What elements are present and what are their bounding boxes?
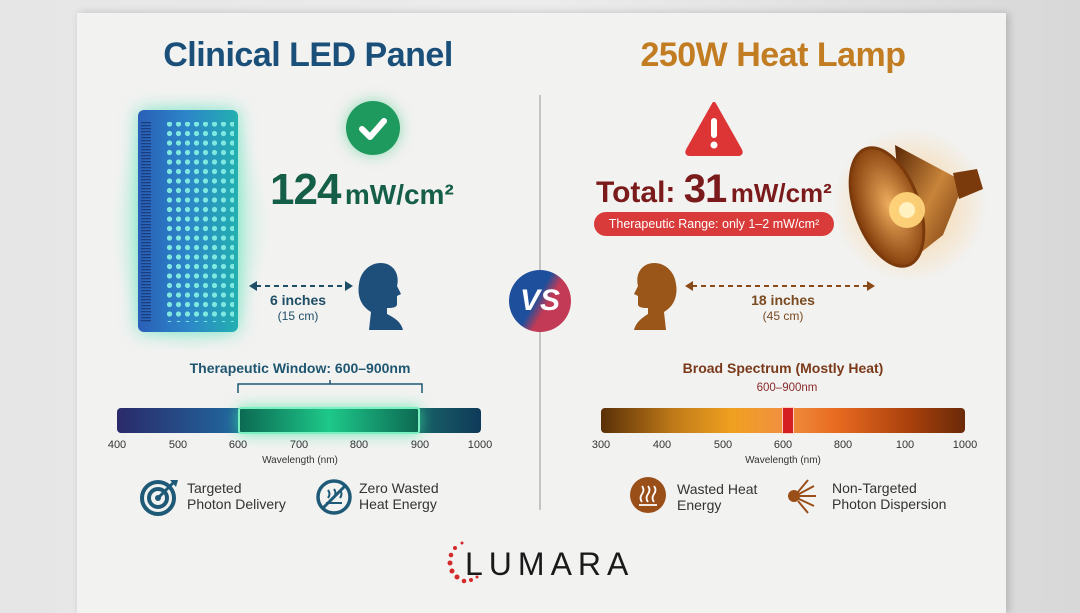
- feature: zero heat: [316, 479, 439, 515]
- text: 700: [290, 439, 308, 451]
- distance lamp: 18 inches: [751, 292, 815, 308]
- icon: heat lamp: [839, 134, 983, 276]
- bracket: [237, 380, 423, 393]
- distance lamp: (45 cm): [763, 309, 803, 323]
- chart: lamp spectrum: [601, 408, 965, 433]
- text: 1000: [468, 439, 492, 451]
- callout: therapeutic range: Therapeutic Range: only 1–2 mW/cm²: [609, 217, 819, 231]
- text: 500: [169, 439, 187, 451]
- feature: dispersion: Non-Targeted: [832, 480, 917, 496]
- text: 400: [108, 439, 126, 451]
- feature: targeted: Photon Delivery: [187, 496, 286, 512]
- title: LED: Clinical LED Panel: [163, 36, 453, 74]
- text: 600: [774, 439, 792, 451]
- arrow: 6 inches: [249, 281, 353, 291]
- VS badge: VS: [520, 284, 560, 317]
- feature: targeted: Targeted: [187, 480, 241, 496]
- text: 800: [350, 439, 368, 451]
- callout: therapeutic range: [594, 212, 834, 236]
- feature: targeted: [140, 480, 286, 516]
- icon: head lamp: [634, 263, 676, 330]
- text: 300: [592, 439, 610, 451]
- heading: therapeutic window: Therapeutic Window: 600–900nm: [190, 360, 410, 376]
- text: 600: [229, 439, 247, 451]
- distance LED: [270, 292, 326, 323]
- text: 100: [896, 439, 914, 451]
- chart: LED spectrum: [117, 408, 481, 433]
- text: 800: [834, 439, 852, 451]
- text: 1000: [953, 439, 977, 451]
- feature: wasted heat: Wasted Heat: [677, 481, 757, 497]
- feature: dispersion: Photon Dispersion: [832, 496, 946, 512]
- text: 900: [411, 439, 429, 451]
- axis label lamp: Wavelength (nm): [745, 455, 821, 466]
- feature: zero heat: Heat Energy: [359, 496, 437, 512]
- text: 400: [653, 439, 671, 451]
- icon: warning: [685, 102, 743, 156]
- text: 500: [714, 439, 732, 451]
- feature: wasted heat: Energy: [677, 497, 721, 513]
- label 600-900: 600–900nm: [757, 382, 817, 394]
- title: heat lamp: 250W Heat Lamp: [640, 36, 906, 74]
- heading: broad spectrum: Broad Spectrum (Mostly Heat): [683, 360, 883, 376]
- distance lamp: [751, 292, 815, 323]
- feature: wasted heat: [630, 477, 758, 513]
- logo: LUMARA: [465, 546, 634, 582]
- arrow: 18 inches: [685, 281, 875, 291]
- icon: head LED: [358, 263, 403, 330]
- distance LED: 6 inches: [270, 292, 326, 308]
- lamp value: Total: 31 mW/cm²: [596, 167, 832, 211]
- axis label LED: Wavelength (nm): [262, 455, 338, 466]
- feature: dispersion: [788, 479, 946, 514]
- feature: zero heat: Zero Wasted: [359, 480, 439, 496]
- divider: [539, 95, 540, 510]
- axis LED: [108, 439, 492, 451]
- icon: LED panel: [118, 96, 262, 348]
- axis lamp: [592, 439, 977, 451]
- distance LED: (15 cm): [278, 309, 318, 323]
- icon: check: [346, 101, 400, 155]
- VS badge: [509, 270, 571, 332]
- LED value: 124 mW/cm²: [270, 165, 454, 214]
